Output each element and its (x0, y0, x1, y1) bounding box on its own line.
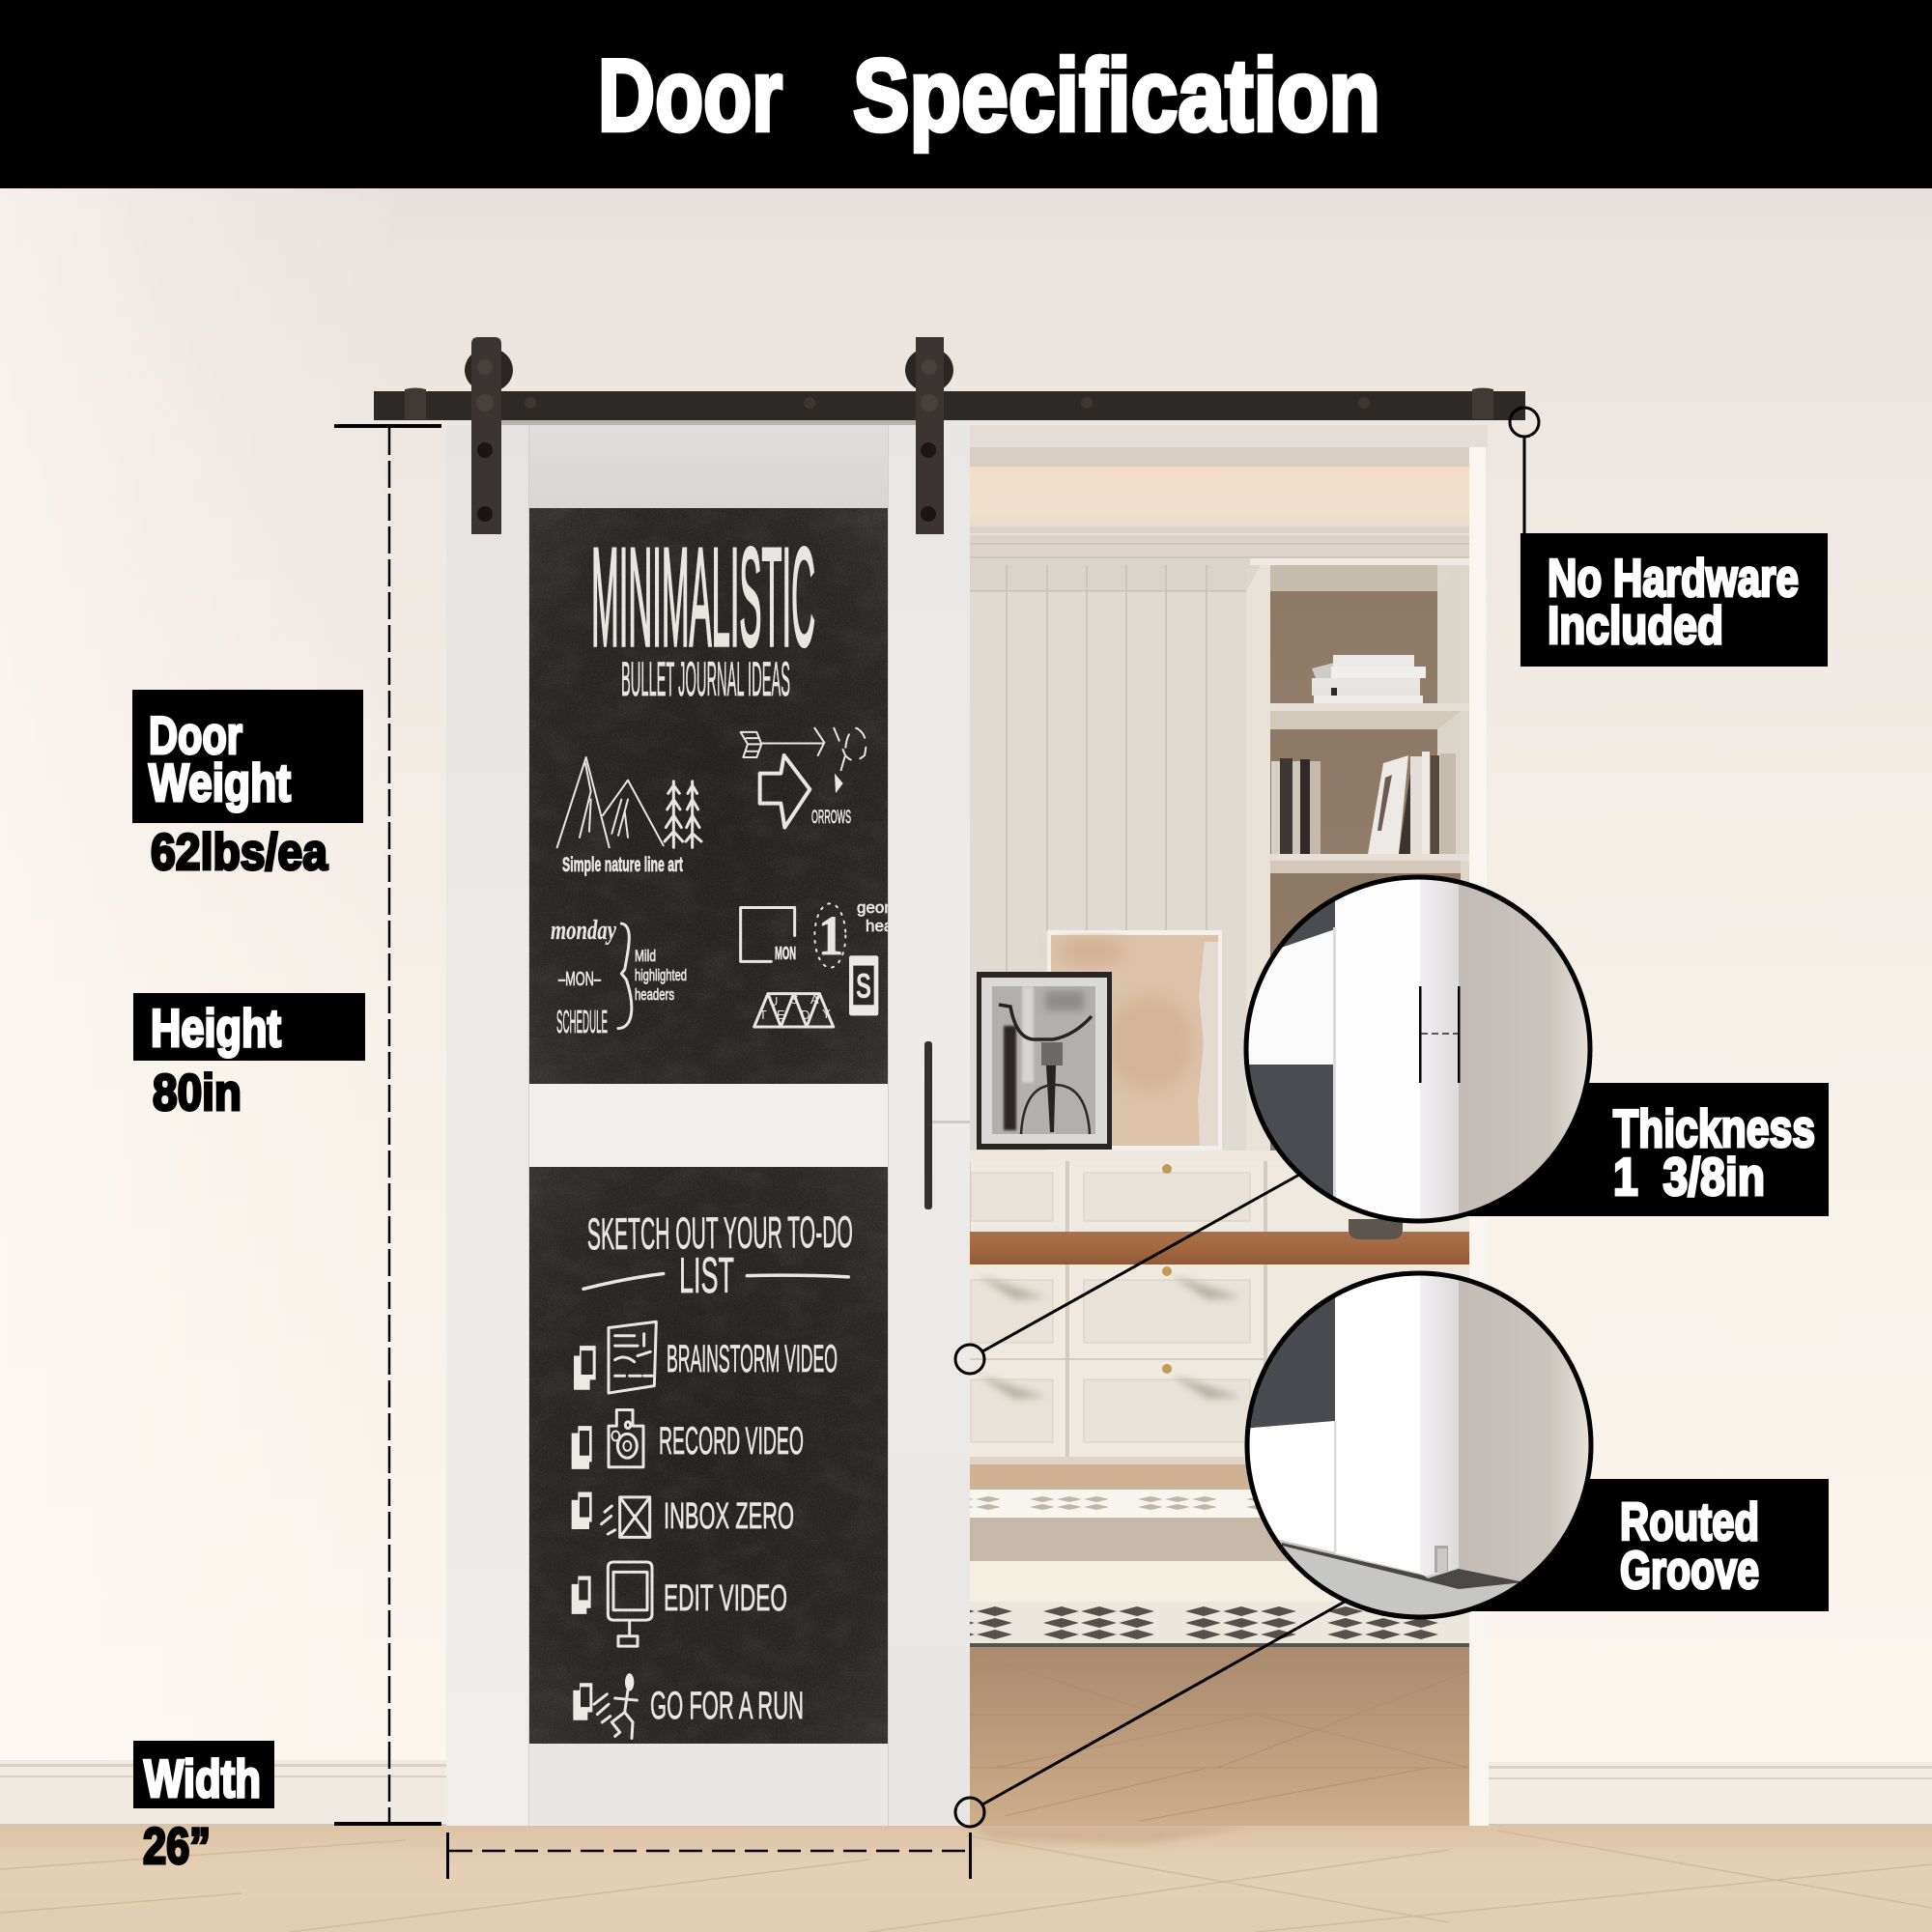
block arrow (760, 755, 810, 828)
chalkboard lower panel: BRAINSTORM VIDEO (667, 1338, 838, 1380)
label bar: thickness: 1 3/8in (1613, 1147, 1765, 1207)
label bar: routed groove: Routed (1620, 1492, 1759, 1551)
chalk geometric headers: geometric (857, 898, 929, 917)
title (598, 39, 1380, 153)
camera icon (609, 1409, 643, 1467)
chalkboard lower panel (529, 1167, 888, 1744)
label bar: thickness (1449, 1083, 1829, 1216)
jamb (1469, 447, 1489, 1826)
magnifier: routed groove (1241, 1270, 1599, 1633)
chalk tuesday letters: S (790, 992, 799, 1007)
chalk tuesday letters (759, 992, 831, 1022)
track rail (374, 391, 1525, 420)
left hanger strap (465, 337, 513, 534)
callout: no hardware: Included (1548, 595, 1723, 655)
mail icon (602, 1497, 650, 1537)
brainstorm icon (609, 1321, 656, 1393)
label: height (133, 993, 365, 1061)
value: width: 26” (143, 1818, 211, 1875)
label bar: routed groove: Groove (1620, 1540, 1759, 1600)
brace (618, 923, 632, 1029)
cabinets (970, 1151, 1469, 1464)
label: height: Height (151, 998, 281, 1058)
header bar (0, 0, 1932, 188)
dotted circle (814, 903, 845, 968)
barn door (446, 425, 970, 1826)
baseboard left (0, 1760, 446, 1826)
chalk tuesday letters: D (801, 1008, 810, 1022)
rail bolts (525, 397, 1370, 409)
chalk tuesday letters: Y (822, 1007, 831, 1021)
pine trees (665, 781, 701, 847)
callout: no hardware (1510, 408, 1828, 667)
feather arrow (741, 728, 824, 757)
rail under-shadow (501, 420, 916, 425)
chalk tuesday letters: A (810, 992, 819, 1007)
callout leader: routed groove (955, 1602, 1345, 1827)
label tile (849, 955, 878, 1015)
runner icon (594, 1673, 637, 1738)
chalk geometric headers: headers (866, 917, 924, 935)
chalk monday: monday (551, 916, 616, 946)
camera flash (611, 1431, 619, 1440)
thickness ticks (1419, 986, 1461, 1083)
camera lens (617, 1434, 637, 1458)
height dimension line (334, 424, 441, 1826)
chalk mild highlighted headers: Mild (635, 947, 656, 965)
chalkboard lower panel: SKETCH OUT YOUR TO-DO (587, 1207, 853, 1259)
inner floor and rug (970, 1464, 1469, 1826)
baseboard right (1489, 1762, 1932, 1826)
bookshelf (1246, 565, 1469, 1153)
heading underlines (583, 1274, 848, 1289)
chalk task text (650, 1338, 838, 1727)
chalk list heading: LIST (679, 1248, 734, 1304)
books top shelf (1312, 655, 1426, 703)
rail hardware (374, 337, 1525, 534)
framed art (1047, 930, 1222, 1151)
chalkboard upper panel: ORROWS (811, 808, 851, 828)
floor foreground (0, 1826, 1932, 1932)
chalk tuesday letters: T (759, 1008, 767, 1022)
chalk box mon: MON (775, 944, 796, 963)
chalk task text: GO FOR A RUN (650, 1685, 804, 1727)
books middle shelf (1271, 752, 1456, 854)
door rails (529, 425, 889, 1826)
label bar: thickness: Thickness (1613, 1098, 1815, 1158)
text: MINIMALISTIC (591, 519, 815, 675)
camera lens inner (623, 1441, 631, 1451)
label: width: Width (144, 1748, 261, 1808)
chalkboard upper panel: BULLET JOURNAL IDEAS (621, 652, 790, 706)
chalk tuesday letters: E (777, 1008, 785, 1022)
label: door weight: Door (149, 705, 242, 765)
bunting triangles (754, 994, 834, 1027)
wood counter (970, 1232, 1469, 1264)
value: height: 80in (153, 1065, 242, 1122)
doorway room scene (970, 425, 1489, 1826)
chalkboard upper panel (529, 508, 888, 1084)
label: door weight (132, 690, 363, 823)
framed bicycle photo (977, 972, 1112, 1150)
checkboxes (572, 1346, 596, 1720)
chalk geometric headers (857, 904, 888, 931)
title: Specification (853, 39, 1380, 153)
value: door weight: 62lbs/ea (151, 824, 327, 881)
chalk task text: INBOX ZERO (664, 1496, 794, 1537)
chalk drawings upper (557, 728, 878, 1029)
magnifier: door thickness (1241, 869, 1599, 1227)
chalk mon: –MON– (558, 969, 602, 990)
rail stop brackets (405, 388, 1493, 419)
chalk tuesday letters: U (769, 994, 778, 1009)
label bar: routed groove (1449, 1479, 1829, 1611)
chalk task text: RECORD VIDEO (659, 1420, 804, 1463)
ceiling and crown (970, 425, 1488, 558)
width dimension line (446, 1833, 972, 1879)
door handle (924, 1041, 970, 1209)
chalkboard upper panel: SCHEDULE (556, 1004, 608, 1039)
label: door weight: Weight (149, 753, 291, 812)
dashed loop arrow (834, 728, 866, 783)
callout leader: thickness (955, 1175, 1299, 1374)
right hanger strap (905, 337, 953, 534)
chalk mild highlighted headers: headers (635, 985, 674, 1004)
chalk mild highlighted headers: highlighted (635, 966, 687, 984)
monitor icon (608, 1562, 652, 1646)
mountains (557, 757, 664, 847)
wall panelling (970, 558, 1250, 1151)
chalk drawings lower (572, 1274, 848, 1738)
chalk task text: EDIT VIDEO (664, 1578, 787, 1619)
small object on counter (1349, 1219, 1403, 1239)
title: Door (598, 39, 782, 153)
calendar box (741, 907, 795, 961)
chalk tile letter: S (856, 966, 871, 1006)
chalk mild highlighted headers (635, 947, 687, 1004)
chalk caption nature: Simple nature line art (562, 854, 683, 876)
callout: no hardware: No Hardware (1548, 548, 1799, 608)
door stiles (446, 425, 970, 1826)
chalk number one: 1 (818, 904, 843, 967)
